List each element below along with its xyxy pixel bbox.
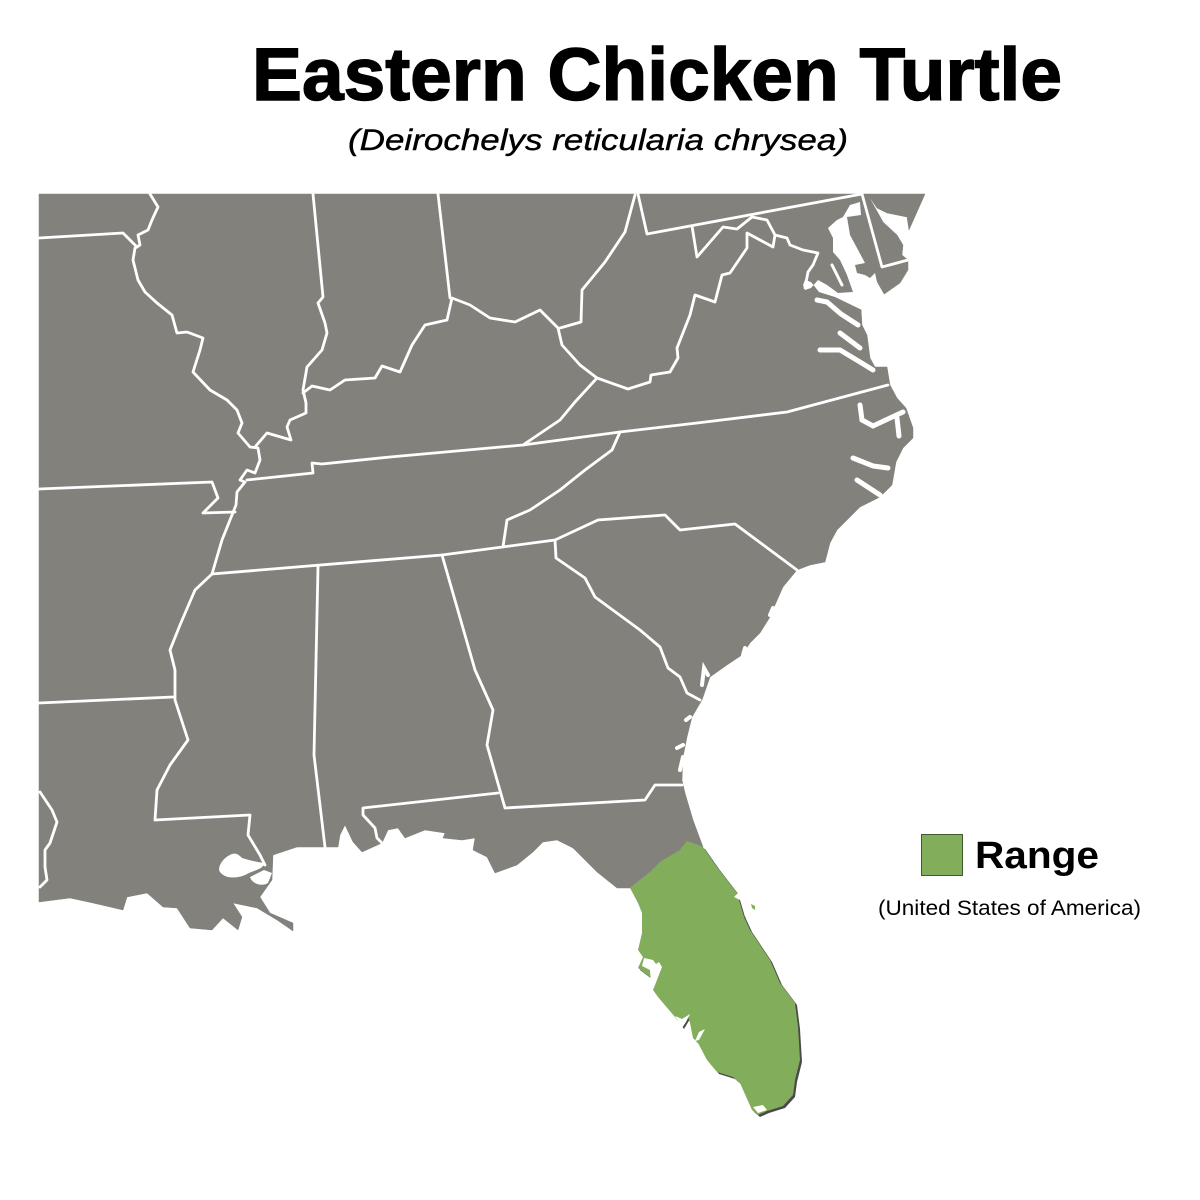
legend label: Range bbox=[975, 835, 1099, 877]
land mass bbox=[39, 194, 925, 931]
map: southeastern United States bbox=[39, 194, 925, 931]
subtitle: scientific name: (Deirochelys reticularia chrysea) bbox=[348, 124, 848, 157]
legend swatch bbox=[922, 834, 962, 876]
Florida range shadow bbox=[632, 843, 802, 1117]
Chesapeake Bay and coastal waters bbox=[142, 202, 903, 926]
title: Eastern Chicken Turtle bbox=[252, 33, 1062, 116]
legend: range bbox=[878, 834, 1141, 920]
state borders bbox=[39, 194, 908, 887]
legend note: (United States of America) bbox=[878, 897, 1141, 920]
Florida range area bbox=[630, 841, 800, 1115]
Lake Pontchartrain bbox=[219, 854, 265, 878]
